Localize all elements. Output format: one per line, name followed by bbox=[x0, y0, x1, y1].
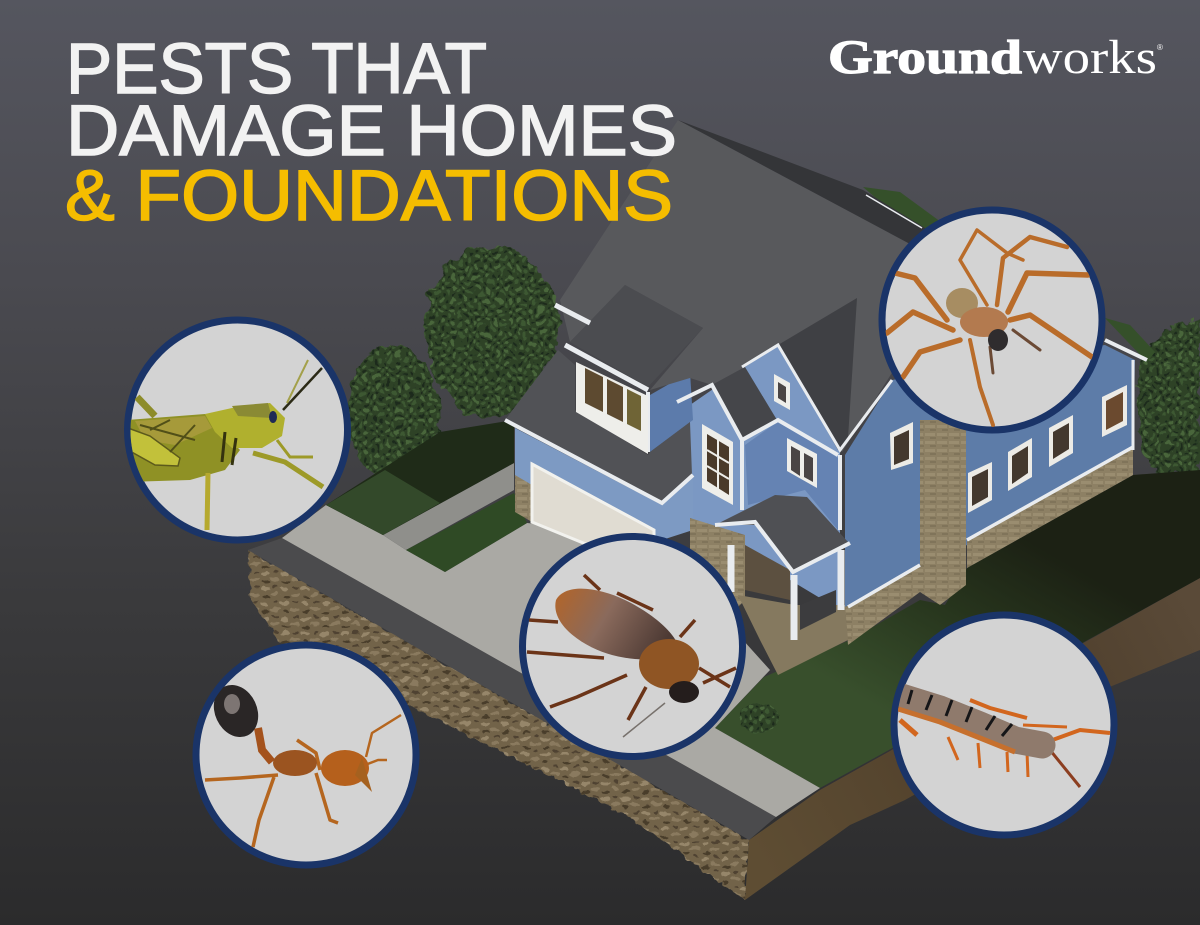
garage door bbox=[532, 464, 654, 572]
title bbox=[65, 30, 677, 236]
front walls bbox=[690, 345, 840, 610]
right wall bbox=[845, 345, 1135, 608]
circle: ant bbox=[196, 645, 416, 865]
porch stone bbox=[690, 518, 745, 610]
logo: works bbox=[1023, 31, 1157, 84]
left lawn bbox=[326, 420, 514, 535]
icon: centipede bbox=[895, 690, 1110, 787]
logo bbox=[828, 31, 1163, 84]
house bbox=[505, 120, 1147, 675]
trees bbox=[346, 245, 1200, 480]
back roof plane bbox=[678, 120, 925, 252]
circle: cockroach bbox=[522, 536, 742, 756]
side windows bbox=[890, 385, 1127, 513]
right soil bbox=[745, 578, 1200, 900]
icon: cockroach bbox=[527, 575, 736, 737]
dormer side wall bbox=[650, 372, 693, 452]
logo: Ground bbox=[828, 31, 1022, 84]
diamond windows bbox=[787, 438, 817, 488]
porch interior bbox=[745, 545, 790, 600]
walkway bbox=[383, 463, 514, 550]
front lawn bbox=[715, 470, 1200, 788]
dormer roof bbox=[570, 285, 703, 387]
icon: ant bbox=[205, 678, 401, 847]
bush bbox=[739, 703, 779, 733]
front soil bbox=[248, 550, 749, 900]
garage wall bbox=[515, 428, 693, 540]
sidewalk and driveway bbox=[282, 505, 820, 817]
small gable roof bbox=[712, 367, 777, 440]
ground slab bbox=[248, 187, 1200, 900]
main roof bbox=[560, 120, 925, 452]
white trim bbox=[505, 195, 1147, 640]
porch roof bbox=[715, 495, 848, 572]
street strip bbox=[248, 538, 776, 840]
icon: grasshopper bbox=[128, 360, 323, 530]
middle lawn bbox=[406, 493, 527, 572]
chimney bbox=[920, 420, 966, 605]
title: PESTS THAT bbox=[66, 30, 487, 109]
logo: ® bbox=[1157, 43, 1163, 52]
gable roof bbox=[778, 298, 857, 450]
title: & FOUNDATIONS bbox=[65, 157, 673, 236]
front window bbox=[702, 424, 733, 505]
dormer window bbox=[576, 362, 648, 454]
right foundation bbox=[967, 447, 1133, 568]
title: DAMAGE HOMES bbox=[66, 92, 677, 171]
circle: centipede bbox=[894, 615, 1114, 835]
porch railing bbox=[800, 590, 836, 630]
back lawn strips bbox=[863, 187, 945, 240]
icon: spider bbox=[887, 230, 1092, 425]
lower garage roof bbox=[505, 350, 692, 503]
circle: grasshopper bbox=[128, 320, 348, 540]
circle: spider bbox=[882, 210, 1102, 430]
steps bbox=[738, 595, 848, 675]
